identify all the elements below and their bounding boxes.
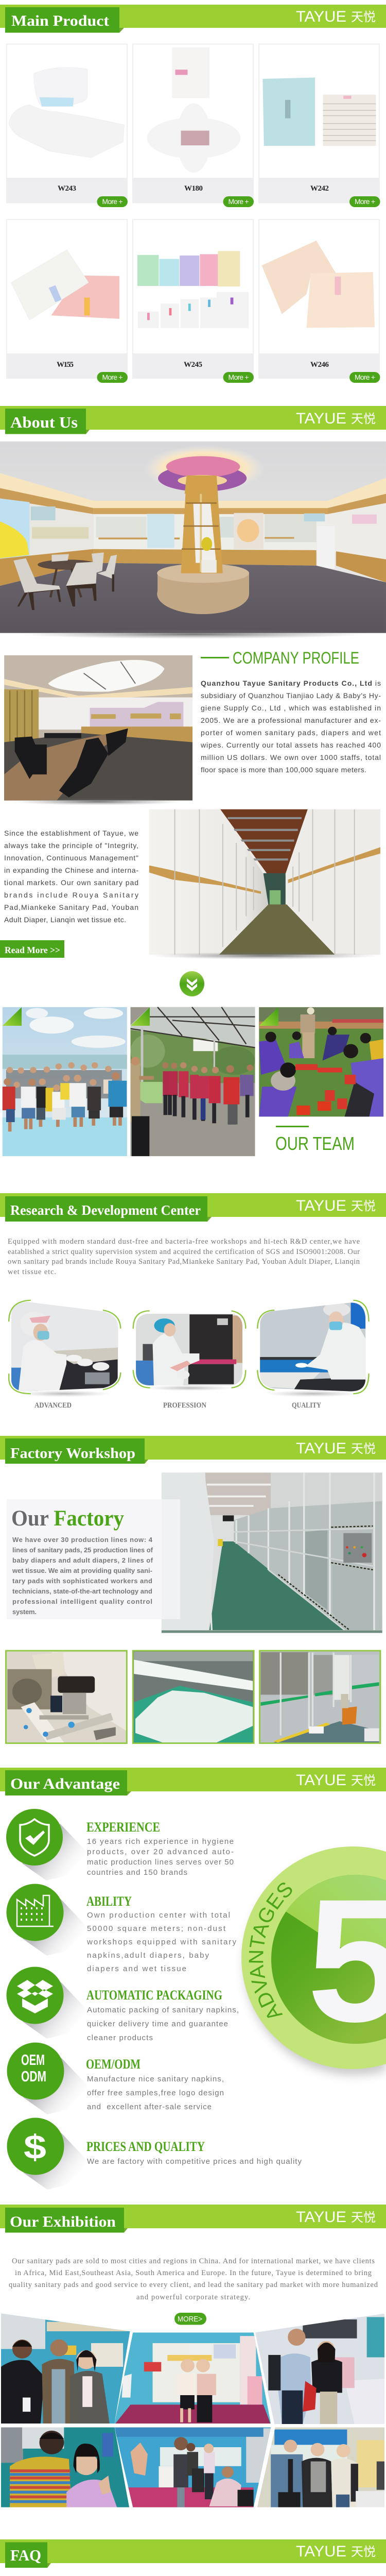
photo: team game on the lawn — [259, 1007, 383, 1116]
photo: team outdoor training under a shelter — [130, 1007, 255, 1156]
text block: factory description: We have over 30 production lines now: 4 — [12, 1536, 153, 1544]
heading: PRICES AND QUALITY: PRICES AND QUALITY — [86, 2139, 205, 2154]
panel: Our Factory overlay — [7, 1499, 180, 1619]
text block: factory description: system. — [12, 1608, 37, 1616]
logo: TAYUE: TAYUE — [296, 1197, 346, 1214]
logo: TAYUE — [296, 1438, 376, 1457]
text block: factory description: professional intelligent quality control — [12, 1598, 152, 1605]
icon: OEM ODM — [7, 2042, 89, 2114]
panel: product card W243 — [6, 44, 128, 207]
banner: Main Product — [0, 5, 386, 33]
button: More: More + — [229, 373, 249, 381]
photo shadow — [13, 798, 183, 805]
model label W245: W245 — [184, 361, 202, 369]
text block: company introduction: million US dollars. We own over 1000 staffs, total — [201, 753, 381, 761]
photo: team at the beach — [3, 1007, 127, 1156]
logo: TAYUE: TAYUE — [296, 1772, 346, 1789]
text block: factory description: wet tissue. We aim at providing quality sani- — [12, 1567, 152, 1574]
model label W242: W242 — [310, 184, 329, 193]
product photo W180 — [147, 48, 240, 173]
heading: About Us: About Us — [10, 413, 78, 431]
photo: lab technician, advanced — [9, 1299, 120, 1397]
heading: Main Product: Main Product — [11, 12, 109, 29]
text block: ability details: Own production center with total — [87, 1911, 230, 1920]
banner: Our Exhibition — [0, 2205, 386, 2233]
badge: 5 Advantages — [239, 1846, 386, 2080]
button: More — [97, 372, 128, 383]
advantage: experience — [6, 1809, 234, 1880]
model label W243: W243 — [58, 184, 76, 193]
advantage: OEM/ODM — [7, 2042, 224, 2114]
logo: TAYUE: 天悦 — [351, 1196, 376, 1214]
logo: TAYUE: 天悦 — [351, 1770, 376, 1788]
logo: TAYUE: 天悦 — [351, 1438, 376, 1456]
photo: automated packing machine — [260, 1651, 380, 1743]
text block: packaging details — [87, 2006, 239, 2042]
text block: packaging details: quicker delivery time and guarantee — [87, 2020, 228, 2028]
photo shadow — [18, 630, 368, 639]
photo: warehouse of material rolls — [149, 809, 380, 955]
text block: research description — [8, 1238, 360, 1276]
icon: open box — [6, 1967, 88, 2039]
text block: research description: Equipped with modern standard dust-free and bacteria-free workshops and hi-tech R&D center,we have — [8, 1238, 360, 1246]
photo shadow — [149, 952, 381, 959]
button: Read More — [0, 940, 64, 958]
text block: exhibition description: and powerful corporate strategy. — [136, 2293, 250, 2301]
text block: company principle: Pad,Miankeke Sanitary Pad, Youban — [4, 903, 138, 911]
button: MORE: MORE> — [178, 2315, 202, 2324]
text block: research description: wet tissue etc. — [8, 1268, 56, 1276]
banner: Our Advantage — [0, 1768, 386, 1795]
text block: experience details: 16 years rich experience in hygiene — [87, 1837, 234, 1846]
heading: OEM/ODM: OEM/ODM — [86, 2057, 141, 2072]
panel: product card W246 — [258, 219, 380, 383]
icon: dollar sign: $ — [24, 2128, 46, 2166]
photo: booth meeting with clients — [114, 2427, 272, 2508]
text block: packaging details: Automatic packing of sanitary napkins, — [87, 2006, 239, 2014]
photo: factory production line — [162, 1472, 382, 1633]
text block: experience details: matic production lines serves over 50 — [87, 1858, 234, 1867]
text block: experience details — [87, 1837, 234, 1877]
logo: TAYUE: 天悦 — [351, 7, 376, 25]
heading: Factory Workshop: Factory Workshop — [10, 1445, 135, 1462]
text block: price details: We are factory with competitive prices and high quality — [87, 2157, 302, 2166]
logo: TAYUE — [296, 409, 376, 427]
icon: shield with check — [6, 1809, 87, 1880]
model label W180: W180 — [184, 184, 203, 193]
heading: ABILITY: ABILITY — [86, 1894, 132, 1909]
text block: company introduction: 2005. We are a professional manufacturer and ex- — [201, 716, 381, 724]
text block: ability details — [86, 1911, 237, 1973]
text block: company principle: tional markets. Our own sanitary pad — [4, 878, 138, 887]
button: MORE — [174, 2313, 206, 2325]
photo: lab technician, quality — [257, 1300, 369, 1397]
advantage: ability — [6, 1884, 237, 1973]
heading: FAQ: FAQ — [10, 2546, 41, 2564]
button: More: More + — [102, 373, 122, 381]
text block: research description: eatablished a strict quality supervision system and acquired the certification of SGS and ISO9001:2008. Our — [8, 1248, 360, 1256]
text block: company principle: Adult Diaper, Lianqin wet tissue etc. — [4, 916, 126, 924]
text block: packaging details: cleaner products — [87, 2033, 153, 2042]
heading: Company Profile: COMPANY PROFILE — [233, 649, 359, 667]
corner tab — [259, 1007, 278, 1026]
banner: Factory Workshop — [0, 1436, 386, 1464]
heading: Our Advantage: Our Advantage — [10, 1775, 120, 1792]
button: Read More: Read More >> — [5, 945, 60, 955]
product photo W243 — [9, 67, 125, 158]
text block: experience details: products, over 20 advanced auto- — [87, 1848, 234, 1856]
heading: Company Profile — [201, 649, 359, 667]
text block: factory description: tary pads with sophisticated workers and — [12, 1577, 152, 1585]
logo: TAYUE: TAYUE — [296, 8, 346, 25]
button: More — [223, 372, 254, 383]
curved label: ADVANTAGES: ADVANTAGES — [249, 1883, 292, 2018]
text block: exhibition description — [9, 2257, 378, 2301]
text block: ability details: napkins,adult diapers, baby — [87, 1951, 209, 1960]
text block: company principle: brands include Rouya Sanitary — [4, 891, 138, 899]
label: ADVANCED: ADVANCED — [34, 1401, 72, 1410]
logo: TAYUE — [296, 1770, 376, 1789]
text block: company principle: Innovation, Continuous Management" — [4, 854, 138, 862]
logo: TAYUE — [296, 2541, 376, 2560]
logo: TAYUE: 天悦 — [351, 2541, 376, 2560]
photo: conference room — [4, 655, 192, 801]
icon: factory building — [6, 1884, 88, 1956]
photo: exhibition booth with three visitors — [1, 2314, 131, 2425]
text block: OEM details — [87, 2075, 224, 2111]
product photo W245 — [137, 251, 249, 328]
logo: TAYUE — [296, 7, 376, 25]
text block: factory description: baby diapers and adult diapers, 2 lines of — [12, 1556, 153, 1564]
photo: visitor with booth staff — [1, 2427, 130, 2508]
text block: exhibition description: quality sanitary pads and good service to every client, and lead the sanitary pad market with more humanized — [9, 2281, 378, 2289]
heading: Our Exhibition: Our Exhibition — [10, 2213, 116, 2230]
text block: company introduction: floor space is more than 100,000 square meters. — [201, 766, 366, 774]
banner: FAQ — [0, 2539, 386, 2568]
panel: product card W180 — [132, 44, 254, 207]
text block: company principle: Since the establishment of Tayue, we — [4, 829, 138, 837]
text block: ability details: workshops equipped with sanitary — [86, 1938, 237, 1946]
photo: exhibition booth with two women — [114, 2332, 272, 2425]
panel: product card W242 — [258, 44, 380, 207]
heading: EXPERIENCE: EXPERIENCE — [86, 1820, 160, 1835]
text block: ability details: 50000 square meters; non-dust — [87, 1924, 226, 1933]
text block: research description: own sanitary pad brands include Rouya Sanitary Pad,Miankeke Sanitary Pad, Youban Adult Diaper, Lianqin — [8, 1258, 360, 1266]
heading: Research & Development Center: Research & Development Center — [10, 1202, 201, 1218]
text block: company introduction: giene Supply Co., Ltd , which was established in — [201, 704, 381, 712]
logo: TAYUE — [296, 2207, 376, 2226]
text block: exhibition description: in Africa, Mid East,Southeast Asia, South America and Europe. In the future, Tayue is determined to bring — [15, 2269, 372, 2277]
text block: experience details: countries and 150 brands — [87, 1868, 187, 1877]
text block: factory description — [12, 1536, 153, 1616]
button: More — [349, 196, 380, 207]
text block: company introduction — [200, 679, 381, 774]
banner: Research & Development Center — [0, 1193, 386, 1222]
logo: TAYUE: TAYUE — [296, 2543, 346, 2560]
product photo W155 — [11, 250, 119, 320]
logo: TAYUE: 天悦 — [351, 2207, 376, 2225]
text block: company principle — [4, 829, 138, 924]
logo: TAYUE: 天悦 — [351, 409, 376, 427]
text block: factory description: technicians, state-of-the-art technology and — [12, 1587, 152, 1595]
button: More: More + — [102, 197, 122, 206]
corner tab — [131, 1007, 150, 1026]
button: More: More + — [229, 197, 249, 206]
logo: TAYUE: TAYUE — [296, 1440, 346, 1457]
label: QUALITY: QUALITY — [292, 1401, 321, 1410]
model label W155: W155 — [57, 361, 74, 369]
text block: company principle: in expanding the Chinese and interna- — [4, 866, 138, 874]
text block: OEM details: Manufacture nice sanitary napkins, — [87, 2075, 224, 2083]
button: More — [97, 196, 128, 207]
photo: three people at baby products booth — [257, 2427, 384, 2507]
text block: company introduction: subsidiary of Quanzhou Tianjiao Lady & Baby's Hy- — [201, 691, 381, 700]
label: PROFESSION: PROFESSION — [163, 1401, 206, 1410]
banner: About Us — [0, 406, 386, 434]
text block: company introduction: wipes. Currently our total assets has reached 400 — [200, 741, 381, 749]
icon: OEM ODM: ODM — [21, 2069, 46, 2085]
button: More: More + — [355, 373, 375, 381]
icon: dollar sign — [7, 2117, 89, 2190]
corner tab — [3, 1007, 22, 1026]
product photo W242 — [262, 78, 376, 146]
model label W246: W246 — [310, 361, 329, 369]
heading: Our Team — [275, 1126, 355, 1154]
photo: machine detail with laser unit — [6, 1651, 127, 1743]
text block: ability details: diapers and wet tissue — [87, 1964, 186, 1973]
logo: TAYUE: TAYUE — [296, 2209, 346, 2226]
photo: lab technician, profession — [133, 1311, 245, 1391]
icon: green double chevron circle — [180, 971, 204, 996]
text block: company introduction: Quanzhou Tayue Sanitary Products Co., Ltd is — [201, 679, 381, 687]
text block: factory description: lines of sanitary pads, 25 production lines of — [12, 1546, 153, 1554]
product photo W246 — [261, 241, 375, 328]
heading: AUTOMATIC PACKAGING: AUTOMATIC PACKAGING — [86, 1988, 222, 2003]
text block: exhibition description: Our sanitary pads are sold to most cities and regions in China. And for international market, we have clients — [12, 2257, 375, 2265]
panel: product card W245 — [132, 219, 254, 383]
icon: OEM ODM: OEM — [21, 2052, 45, 2069]
photo: exhibition visitors at stand — [255, 2314, 385, 2425]
button: More — [349, 372, 380, 383]
text block: company introduction: porter of women sanitary pads, diapers and wet — [201, 728, 381, 737]
advantage: automatic packaging — [6, 1967, 239, 2042]
photo: sanitary pad on conveyor — [133, 1651, 254, 1743]
text block: company principle: always take the principle of "Integrity, — [4, 841, 138, 850]
logo: TAYUE: TAYUE — [296, 410, 346, 427]
button: More — [223, 196, 254, 207]
heading: Our Team: OUR TEAM — [275, 1133, 355, 1154]
text block: OEM details: offer free samples,free logo design — [87, 2089, 224, 2097]
button: More: More + — [355, 197, 375, 206]
logo: TAYUE — [296, 1196, 376, 1214]
heading: Our Factory: Our Factory — [11, 1506, 124, 1531]
panel: product card W155 — [6, 219, 128, 383]
text block: OEM details: and excellent after-sale service — [87, 2103, 212, 2111]
advantage: prices and quality — [7, 2117, 302, 2190]
photo: showroom with mushroom-shaped display — [0, 442, 386, 633]
